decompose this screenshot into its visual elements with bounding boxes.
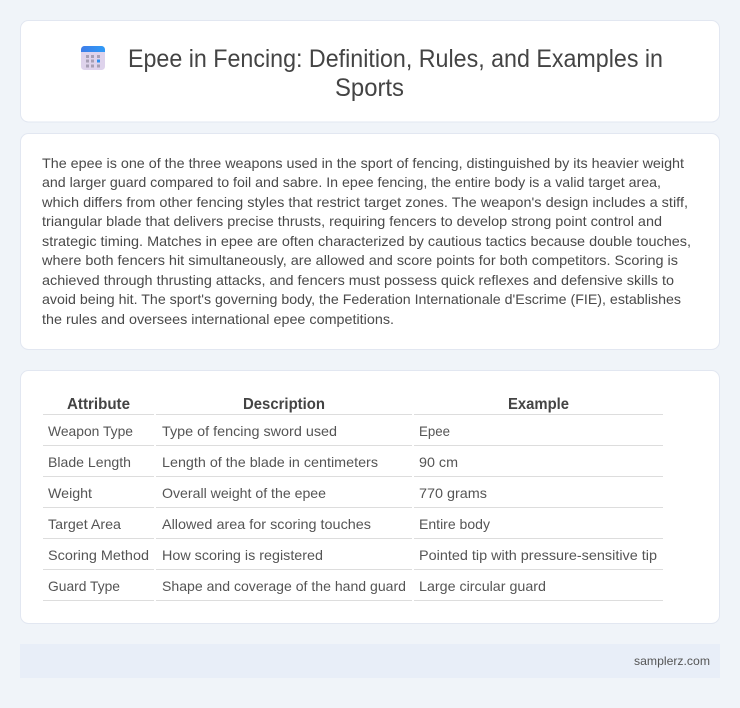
- table row: blade length: Length of the blade in centimeters: [162, 454, 378, 470]
- title: Sports: [335, 74, 404, 102]
- text block: epee overview: where both fencers hit simultaneously, are allowed and score points for both competitors. Scoring is: [41, 252, 678, 268]
- text block: epee overview: triangular blade that delivers precise thrusts, requiring fencers to develop strong point control and: [42, 213, 662, 229]
- table row: guard type: Large circular guard: [419, 578, 546, 594]
- title: Epee in Fencing: Definition, Rules, and Examples in: [128, 45, 663, 73]
- table row: weight: Weight: [48, 485, 92, 501]
- panel: attribute table: [20, 370, 720, 624]
- text block: epee overview: [41, 155, 691, 327]
- panel: title header: [20, 20, 720, 122]
- table row: weight: Overall weight of the epee: [162, 485, 326, 501]
- footer: samplerz.com: [634, 654, 710, 668]
- panel: description: [20, 134, 720, 350]
- table row: blade length: 90 cm: [419, 454, 458, 470]
- text block: epee overview: and larger guard compared to foil and sabre. In epee fencing, the entire body is a valid target area,: [42, 174, 661, 190]
- table row: scoring method: [48, 547, 657, 563]
- table row: blade length: [48, 454, 458, 470]
- table row: weapon type: [48, 423, 450, 439]
- text block: epee overview: the rules and oversees international epee competitions.: [42, 311, 394, 327]
- table row: weapon type: Epee: [419, 423, 450, 439]
- table row: guard type: Guard Type: [48, 578, 120, 594]
- table row: target area: [48, 516, 490, 532]
- table row: guard type: [48, 578, 546, 594]
- table row: weapon type: Type of fencing sword used: [162, 423, 337, 439]
- text block: epee overview: which differs from other fencing styles that restrict target zones. The weapon's design includes a stiff,: [41, 194, 688, 210]
- table header: Example: [508, 396, 569, 413]
- text block: epee overview: strategic timing. Matches in epee are often characterized by cautious tactics because double touches,: [42, 233, 691, 249]
- footer: [20, 644, 720, 678]
- title: [128, 45, 663, 102]
- table row: scoring method: Pointed tip with pressure-sensitive tip: [419, 547, 657, 563]
- text block: epee overview: avoid being hit. The sport's governing body, the Federation Internationale d'Escrime (FIE), establishes: [42, 291, 681, 307]
- table row: weight: [48, 485, 487, 501]
- table row: target area: Allowed area for scoring touches: [162, 516, 371, 532]
- table row: target area: Entire body: [419, 516, 490, 532]
- text block: epee overview: achieved through thrusting attacks, and fencers must possess quick reflexes and defensive skills to: [42, 272, 674, 288]
- table row: scoring method: Scoring Method: [48, 547, 149, 563]
- table header: [67, 396, 569, 413]
- table header: Attribute: [67, 396, 130, 413]
- text block: epee overview: The epee is one of the three weapons used in the sport of fencing, distinguished by its heavier weight: [42, 155, 684, 171]
- icon: calendar: [81, 46, 105, 70]
- table row: weapon type: Weapon Type: [48, 423, 133, 439]
- table header: Description: [243, 396, 325, 413]
- table row: scoring method: How scoring is registered: [162, 547, 323, 563]
- table row: blade length: Blade Length: [48, 454, 131, 470]
- table row: weight: 770 grams: [419, 485, 487, 501]
- table row: guard type: Shape and coverage of the hand guard: [162, 578, 406, 594]
- table row: target area: Target Area: [48, 516, 121, 532]
